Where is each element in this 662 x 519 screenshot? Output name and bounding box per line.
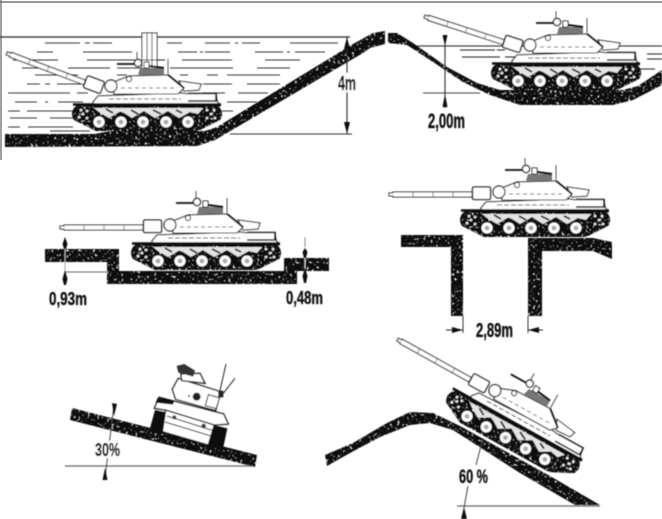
label: 30%: 30%	[95, 440, 120, 460]
ground: hill	[325, 412, 600, 505]
tank: rear view on side slope	[150, 364, 235, 451]
label: 2,00m: 2,00m	[428, 110, 465, 133]
dimension: 0.93 m step	[49, 237, 108, 309]
label: 0,48m: 0,48m	[286, 288, 323, 308]
ground: river crossing basin	[388, 33, 662, 105]
dimension: 2.00 m depth	[423, 35, 480, 133]
tank: spanning the trench	[389, 158, 610, 237]
panel: deep fording with snorkel, 4 m	[0, 31, 385, 147]
page frame	[0, 0, 662, 160]
dimension: 30 % slope	[65, 403, 253, 480]
ground: trench walls	[401, 235, 612, 316]
dimension: 60 % slope	[457, 438, 600, 519]
ground: side slope	[70, 408, 257, 467]
label: 0,93m: 0,93m	[49, 289, 87, 309]
snorkel tower	[142, 33, 165, 77]
dimension: 4 m depth	[230, 37, 358, 134]
tank: climbing slope	[377, 308, 609, 484]
label: 60 %: 60 %	[459, 467, 488, 488]
panel: vertical steps, 0.93 m and 0.48 m	[45, 191, 329, 309]
tank: wading with gun raised	[423, 9, 641, 90]
panel: side slope, 30 %	[65, 364, 257, 480]
ground: riverbed and ramp	[5, 31, 385, 147]
ground: stepped trench	[45, 249, 329, 284]
dimension: 0.48 m step	[286, 237, 323, 308]
panel: trench crossing, 2.89 m	[389, 158, 612, 342]
tank: submerged with gun raised	[5, 46, 222, 131]
label: 4m: 4m	[338, 73, 356, 95]
water surface and ripples	[0, 37, 350, 131]
dimension: 2.89 m width	[446, 316, 543, 342]
water surface	[415, 46, 662, 69]
label: 2,89m: 2,89m	[476, 320, 513, 342]
panel: frontal slope, 60 %	[325, 308, 609, 519]
panel: wading without preparation, 2.00 m	[388, 9, 662, 133]
tank: on level ground	[60, 191, 281, 270]
